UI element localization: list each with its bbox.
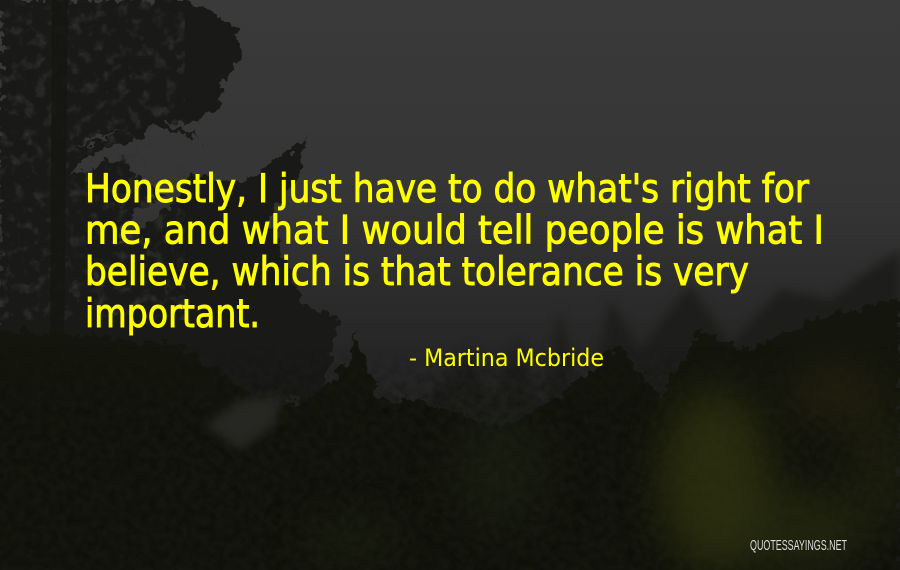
- quote text: believe, which is that tolerance is very: [85, 250, 749, 295]
- attribution: - Martina Mcbride: [409, 344, 604, 372]
- sky gaps showing through the left tree: [0, 0, 185, 320]
- forest mottling: [28, 385, 900, 556]
- large left fir tree: [0, 0, 340, 400]
- near dark forest floor: [0, 300, 900, 570]
- far misty treeline: [430, 250, 900, 570]
- dark trunk: [50, 0, 68, 350]
- olive foliage highlights: [300, 363, 900, 570]
- quote text: [85, 167, 824, 337]
- pale gap in the lower-left trees: [205, 395, 282, 450]
- quote text: me, and what I would tell people is what I: [85, 208, 824, 254]
- quote text: Honestly, I just have to do what's right for: [85, 167, 810, 212]
- quote text: important.: [85, 292, 260, 337]
